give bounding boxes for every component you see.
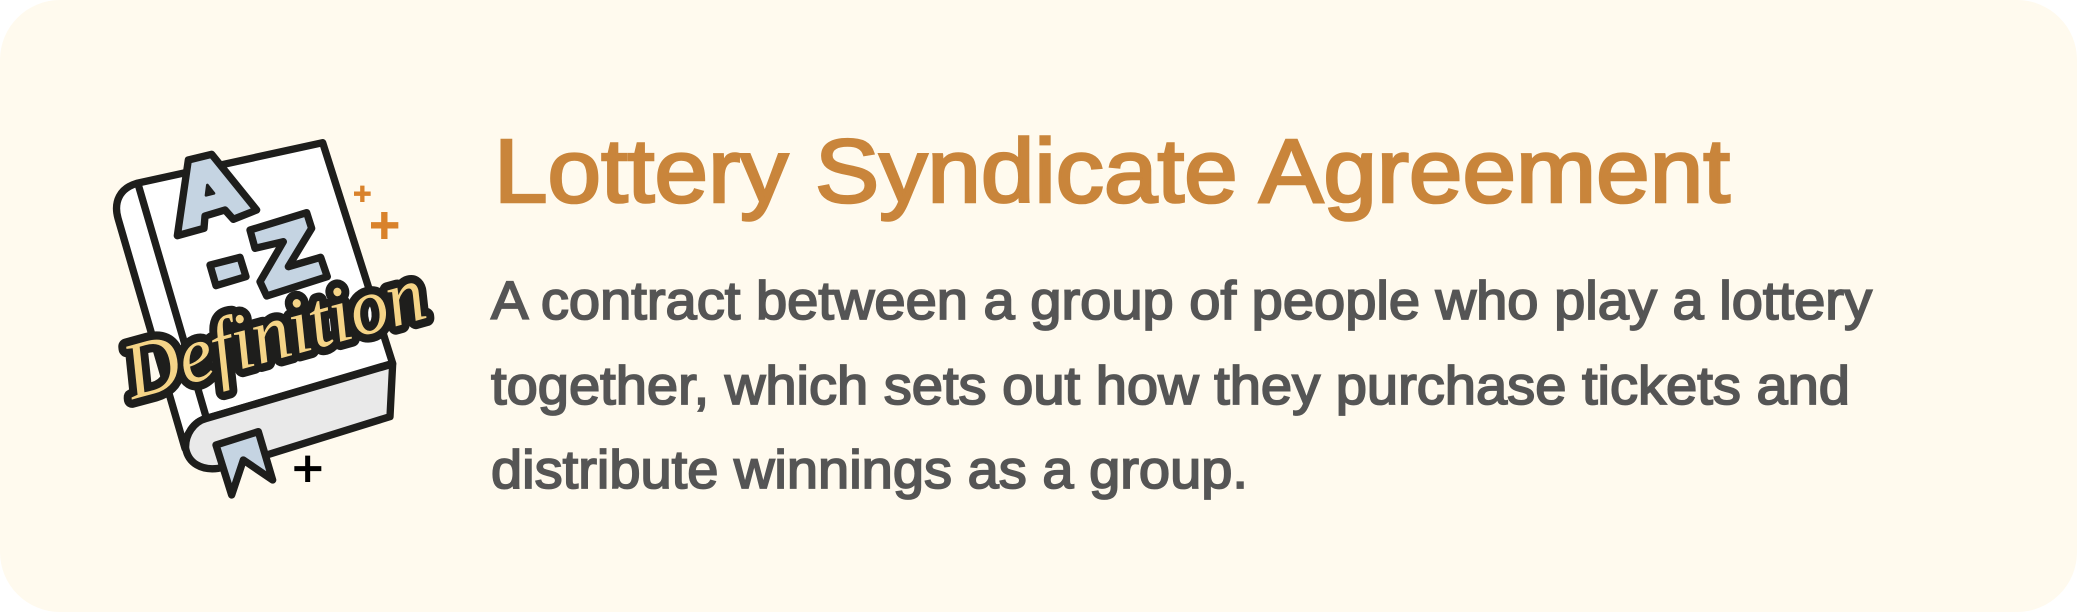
small orange plus — [354, 186, 371, 202]
body line 1: A contract between a group of people who play a lottery — [491, 271, 1872, 331]
script word: Definition — [113, 249, 435, 417]
black plus — [294, 456, 321, 482]
title: Lottery Syndicate Agreement — [494, 122, 1730, 222]
bookmark ribbon — [216, 432, 273, 495]
letter A counter — [206, 185, 214, 195]
body line 2: together, which sets out how they purchase tickets and — [491, 356, 1850, 416]
book spine line — [138, 185, 206, 417]
letter Z — [250, 213, 327, 296]
hyphen — [210, 257, 246, 286]
word fill: Definition — [113, 249, 435, 417]
body line 3: distribute winnings as a group. — [491, 440, 1248, 500]
word outline: Definition — [113, 249, 435, 417]
book cover — [117, 143, 393, 448]
book pages — [186, 364, 393, 469]
large orange plus — [371, 212, 398, 239]
icon: definition book — [113, 143, 435, 495]
body text — [491, 271, 1872, 500]
letter A — [177, 154, 257, 236]
